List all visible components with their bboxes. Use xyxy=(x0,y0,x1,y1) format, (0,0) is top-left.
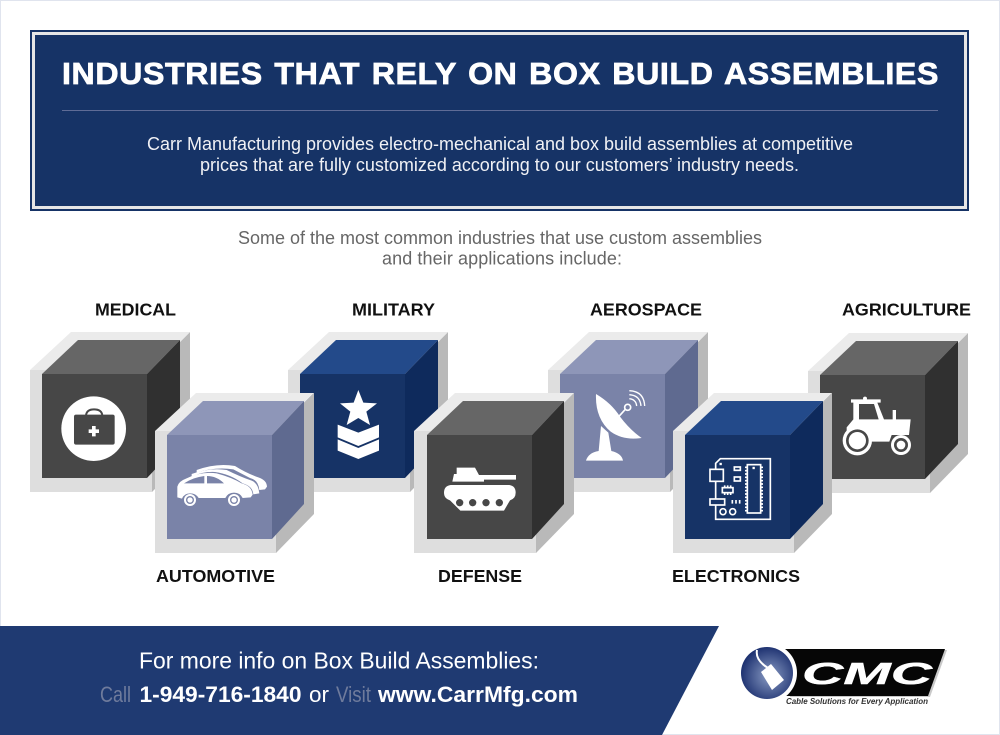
label: automotive: AUTOMOTIVE xyxy=(156,566,275,586)
header panel xyxy=(30,30,969,211)
title: INDUSTRIES THAT RELY ON BOX BUILD ASSEMBLIES xyxy=(62,57,939,91)
label: military: MILITARY xyxy=(352,300,435,320)
contact line: 1-949-716-1840 xyxy=(140,682,302,707)
icon: cars xyxy=(177,465,267,506)
label: medical: MEDICAL xyxy=(95,300,176,320)
logo: CMC xyxy=(737,643,947,706)
label: aerospace: AEROSPACE xyxy=(590,300,702,320)
intro text: Carr Manufacturing provides electro-mechanical and box build assemblies at competitive xyxy=(147,134,853,154)
label: electronics: ELECTRONICS xyxy=(672,566,800,586)
icon: satellite dish xyxy=(586,391,645,461)
logo wordmark: CMC xyxy=(802,656,933,691)
cube: defense xyxy=(414,393,574,553)
label: defense: DEFENSE xyxy=(438,566,522,586)
icon: medical case xyxy=(61,396,126,461)
icon: circuit board xyxy=(710,459,770,519)
footer heading: For more info on Box Build Assemblies: xyxy=(139,648,539,674)
icon: star and chevrons xyxy=(338,390,379,459)
logo tagline: Cable Solutions for Every Application xyxy=(786,697,928,706)
label: agriculture: AGRICULTURE xyxy=(842,300,971,320)
footer banner xyxy=(0,626,719,735)
contact line: Call xyxy=(100,682,131,707)
intro text: prices that are fully customized according to our customers’ industry needs. xyxy=(200,155,799,175)
cube: military xyxy=(288,332,448,492)
contact line: Visit xyxy=(336,682,371,707)
subheading: Some of the most common industries that use custom assemblies xyxy=(238,228,762,248)
cube: agriculture xyxy=(808,333,968,493)
cube: medical xyxy=(30,332,190,492)
icon: tank xyxy=(444,468,516,511)
cube: automotive xyxy=(155,393,314,553)
cube: electronics xyxy=(673,393,832,553)
icon: tractor xyxy=(843,397,911,455)
cube: aerospace xyxy=(548,332,708,492)
contact line: or xyxy=(309,682,329,707)
contact line: www.CarrMfg.com xyxy=(377,682,578,707)
subheading: and their applications include: xyxy=(382,248,622,268)
